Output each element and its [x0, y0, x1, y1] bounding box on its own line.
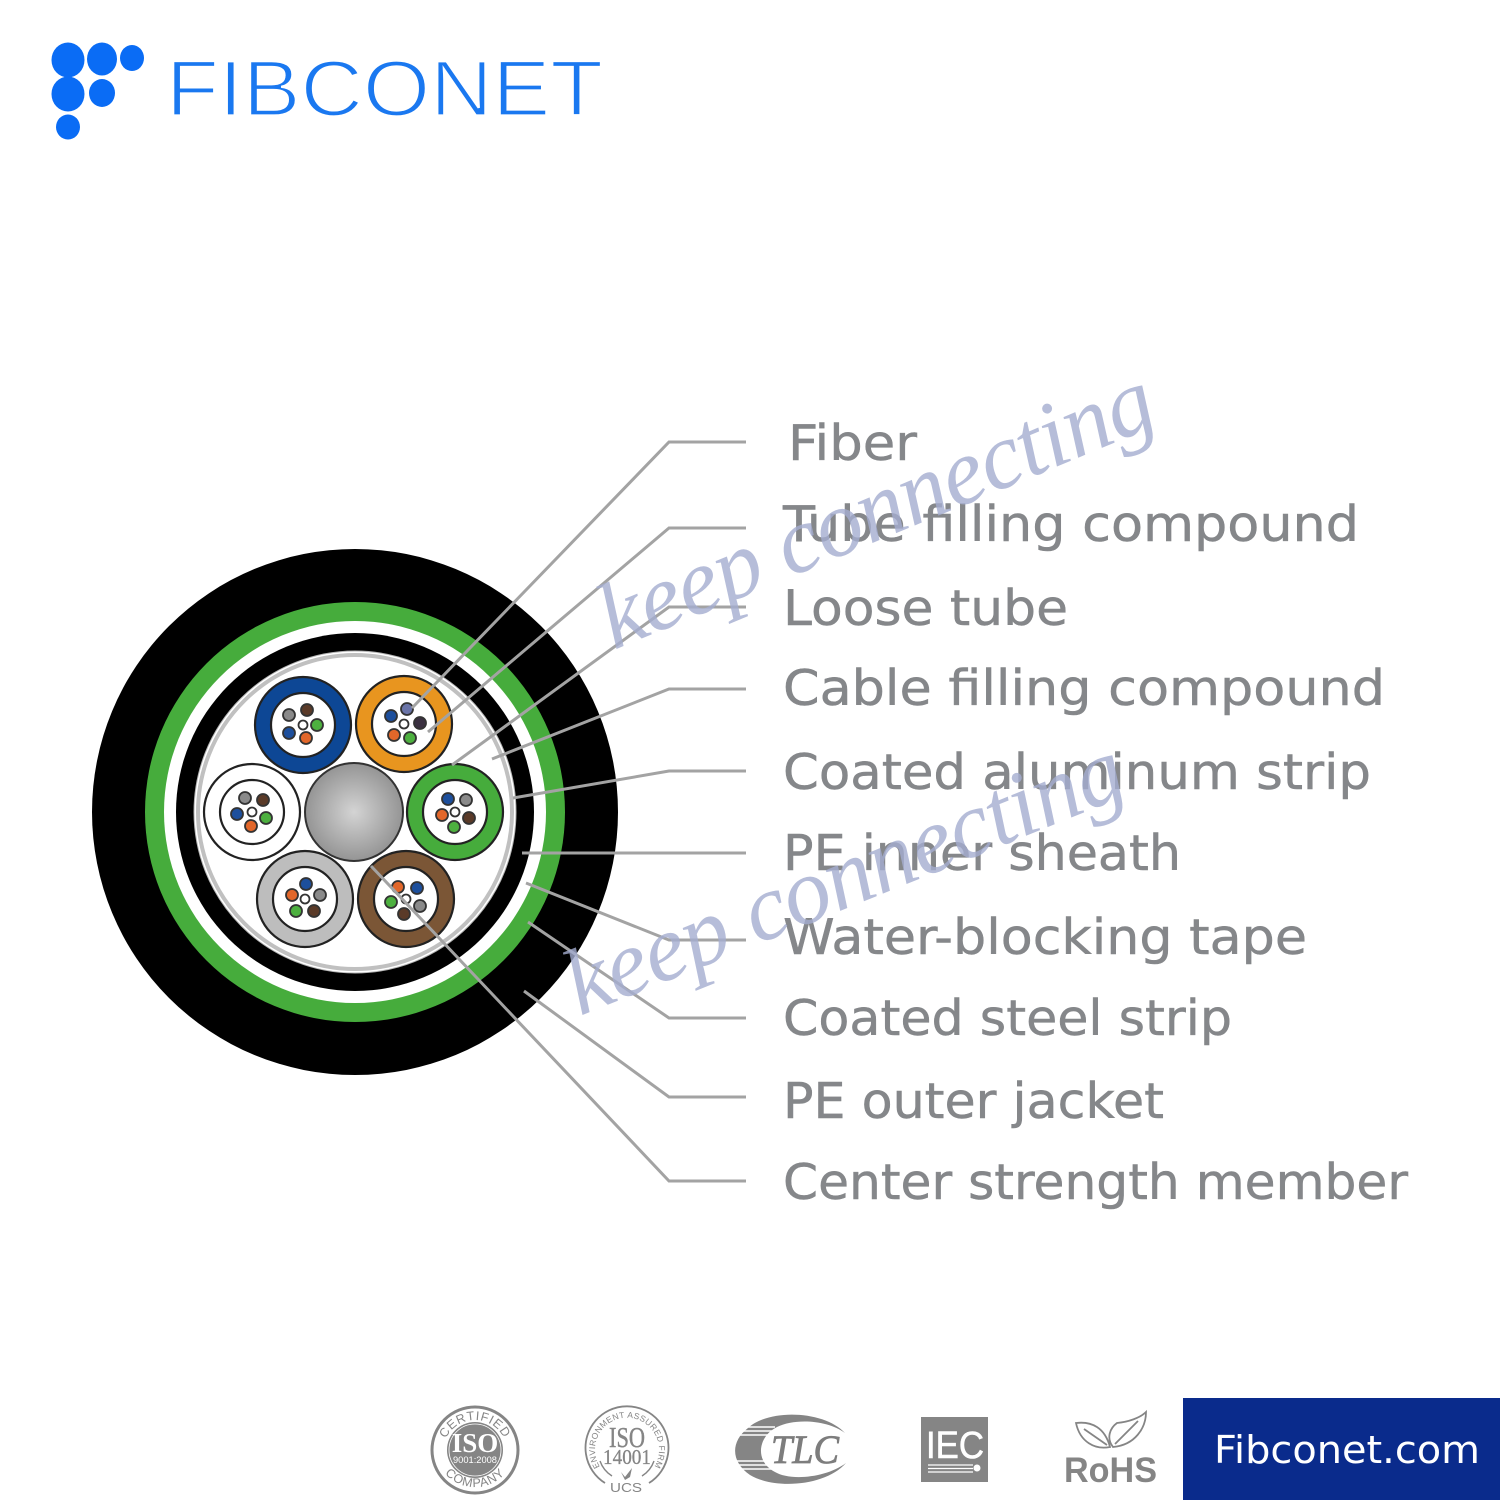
component labels: Loose tube: [783, 580, 1068, 637]
coated steel strip: [145, 602, 565, 1022]
loose tube: brown: [358, 851, 454, 947]
badge: ISO 14001: ISO: [609, 1422, 645, 1454]
badge: ISO 14001: ENVIRONMENT ASSURED FIRM: [589, 1412, 665, 1469]
component labels: PE inner sheath: [783, 825, 1181, 882]
center strength member: [305, 763, 403, 861]
leader lines: [371, 442, 746, 1181]
loose tube: green: [407, 764, 503, 860]
watermark: upper: keep connecting: [582, 347, 1169, 669]
badge: RoHS: RoHS: [1064, 1451, 1157, 1490]
component labels: PE outer jacket: [783, 1073, 1164, 1130]
badge: ISO 9001: ISO: [452, 1428, 498, 1458]
component labels: Water-blocking tape: [783, 909, 1307, 966]
badge: TLC: [735, 1415, 846, 1484]
website banner: [1183, 1398, 1500, 1500]
badge: ISO 14001: [584, 1405, 670, 1495]
water-blocking tape: [164, 621, 546, 1003]
loose tube: blue: [255, 677, 351, 773]
coated aluminum strip: [194, 651, 516, 973]
PE outer jacket: [92, 549, 618, 1075]
loose tube: gray: [257, 851, 353, 947]
badge: ISO 9001: COMPANY: [446, 1468, 502, 1488]
PE inner sheath: [176, 633, 534, 991]
component labels: Coated aluminum strip: [783, 744, 1371, 801]
icon: blue dots: [52, 42, 144, 140]
badge: IEC: IEC: [926, 1425, 984, 1467]
logo: FIBCONET: [52, 42, 603, 140]
component labels: [782, 415, 1409, 1211]
badge: ISO 9001: [430, 1406, 520, 1494]
wordmark: FIBCONET: [166, 44, 603, 132]
component labels: Tube filling compound: [782, 496, 1359, 553]
badge: TLC: TLC: [771, 1427, 840, 1472]
loose tube: orange: [356, 676, 452, 772]
component labels: Cable filling compound: [783, 660, 1385, 717]
badge: RoHS: [1064, 1412, 1157, 1490]
badge: IEC: [921, 1417, 988, 1482]
badge: ISO 14001: UCS: [610, 1480, 642, 1495]
component labels: Coated steel strip: [783, 990, 1232, 1047]
watermark: lower: keep connecting: [549, 717, 1139, 1035]
badge: ISO 14001: 14001: [603, 1445, 651, 1469]
cable cross-section: [92, 549, 618, 1075]
component labels: Fiber: [788, 415, 918, 472]
website banner: Fibconet.com: [1214, 1428, 1480, 1472]
badge: ISO 9001: CERTIFIED: [440, 1411, 510, 1436]
badge: ISO 9001: 9001:2008: [453, 1455, 497, 1466]
component labels: Center strength member: [783, 1154, 1409, 1211]
loose tube: white: [204, 764, 300, 860]
